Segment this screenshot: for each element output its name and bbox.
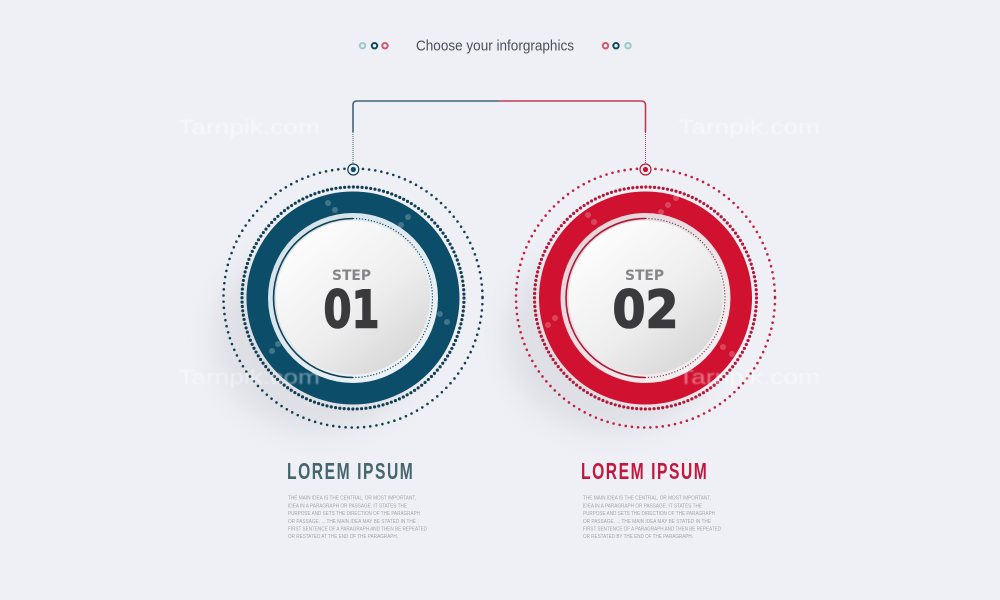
step 1 body text: FIRST SENTENCE OF A PARAGRAPH AND THEN BE REPEATED: [288, 526, 427, 532]
disc: [276, 220, 430, 374]
header title: Choose your inforgraphics: [416, 38, 574, 54]
step label: STEP: [625, 268, 664, 284]
step 2 body text: FIRST SENTENCE OF A PARAGRAPH AND THEN BE REPEATED: [583, 526, 721, 532]
node marker: [348, 164, 359, 175]
ring sparkles: [545, 195, 735, 357]
inner dotted ring: [534, 187, 756, 409]
header dots left: [360, 43, 388, 48]
watermarks: Tarnpik.com: [178, 117, 320, 139]
step 2 body text: OR PASSAGE. ... THE MAIN IDEA MAY BE STATED IN THE: [583, 519, 712, 525]
watermarks: [178, 117, 820, 389]
disc: [568, 220, 722, 374]
node marker: [640, 164, 651, 175]
step 2 body text: OR RESTATED BY THE END OF THE PARAGRAPH.: [583, 534, 693, 540]
step 2 body text: IDEA IN A PARAGRAPH OR PASSAGE. IT STATES THE: [583, 504, 703, 510]
step label: STEP: [332, 268, 371, 284]
step 2 circle: [505, 164, 775, 433]
step 2 body text: PURPOSE AND SETS THE DIRECTION OF THE PARAGRAPH: [583, 511, 715, 517]
main colour ring: [246, 192, 460, 404]
header: [360, 38, 631, 54]
connector bracket: [353, 101, 646, 165]
main colour ring: [539, 192, 752, 404]
soft shadow: [213, 243, 423, 433]
watermarks: Tarnpik.com: [678, 117, 820, 139]
thin dotted arc: [646, 218, 725, 378]
outer dotted ring: [516, 168, 775, 428]
watermarks: Tarnpik.com: [178, 367, 320, 389]
step 1 body text: [288, 496, 427, 540]
step 1 body text: OR PASSAGE. ... THE MAIN IDEA MAY BE STATED IN THE: [288, 519, 417, 525]
light inner ring: [560, 213, 730, 383]
inner dotted ring: [242, 187, 464, 409]
step 1 body text: PURPOSE AND SETS THE DIRECTION OF THE PARAGRAPH: [288, 511, 420, 517]
step 1 circle: [213, 164, 482, 433]
step 2 body text: [583, 496, 721, 540]
step number: 01: [324, 280, 380, 340]
header dots right: [603, 43, 631, 48]
ring sparkles: [269, 200, 450, 354]
thin dotted arc: [353, 218, 432, 378]
step 1 heading: LOREM IPSUM: [287, 459, 413, 485]
step 2 body text: THE MAIN IDEA IS THE CENTRAL, OR MOST IMPORTANT,: [583, 496, 711, 502]
watermarks: Tarnpik.com: [678, 367, 820, 389]
thin solid arc: [566, 218, 646, 378]
thin solid arc: [274, 218, 353, 378]
step 1 body text: THE MAIN IDEA IS THE CENTRAL, OR MOST IMPORTANT,: [288, 496, 416, 502]
step 1 body text: IDEA IN A PARAGRAPH OR PASSAGE. IT STATES THE: [288, 504, 408, 510]
outer dotted ring: [224, 168, 482, 428]
light inner ring: [268, 213, 438, 383]
step 1 body text: OR RESTATED AT THE END OF THE PARAGRAPH.: [288, 534, 398, 540]
soft shadow: [505, 243, 715, 433]
step number: 02: [612, 280, 678, 340]
step 2 heading: LOREM IPSUM: [581, 459, 707, 485]
